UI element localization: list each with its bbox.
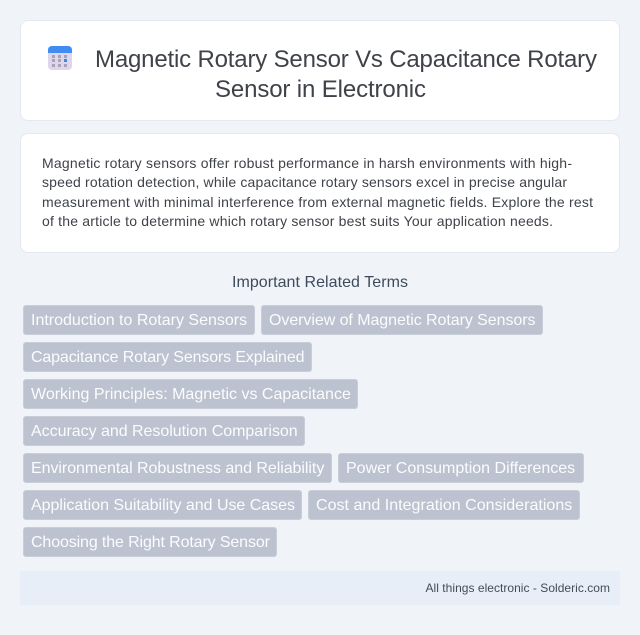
tag: Capacitance Rotary Sensors Explained — [31, 349, 304, 366]
tag: Cost and Integration Considerations — [316, 497, 572, 514]
tag — [23, 305, 255, 335]
title: Sensor in Electronic — [215, 76, 426, 103]
summary text — [42, 155, 593, 229]
footer — [20, 571, 620, 605]
tag — [338, 453, 584, 483]
tag: Working Principles: Magnetic vs Capacitance — [31, 386, 351, 403]
summary card — [20, 133, 620, 253]
tag list — [23, 305, 584, 557]
icon: calendar — [48, 46, 72, 70]
tag: Application Suitability and Use Cases — [31, 497, 295, 514]
summary text: speed rotation detection, while capacitance rotary sensors excel in precise angular — [42, 174, 567, 190]
tag — [261, 305, 543, 335]
tag — [23, 490, 302, 520]
tag — [308, 490, 580, 520]
tag — [23, 342, 312, 372]
tag: Accuracy and Resolution Comparison — [31, 423, 298, 440]
tag: Power Consumption Differences — [346, 460, 575, 477]
tag — [23, 416, 305, 446]
tag — [23, 379, 358, 409]
title — [95, 46, 597, 103]
summary text: measurement with minimal interference from external magnetic fields. Explore the rest — [42, 194, 593, 210]
tag: Overview of Magnetic Rotary Sensors — [269, 312, 535, 329]
header card — [20, 20, 620, 121]
summary text: Magnetic rotary sensors offer robust performance in harsh environments with high- — [42, 155, 572, 171]
summary text: of the article to determine which rotary sensor best suits Your application needs. — [42, 213, 553, 229]
tag: Introduction to Rotary Sensors — [31, 312, 247, 329]
tag: Environmental Robustness and Reliability — [31, 460, 324, 477]
title: Magnetic Rotary Sensor Vs Capacitance Rotary — [95, 46, 597, 73]
tag — [23, 453, 332, 483]
footer: All things electronic - Solderic.com — [426, 581, 610, 595]
heading: related terms: Important Related Terms — [232, 274, 408, 291]
tag — [23, 527, 277, 557]
tag: Choosing the Right Rotary Sensor — [31, 534, 270, 551]
